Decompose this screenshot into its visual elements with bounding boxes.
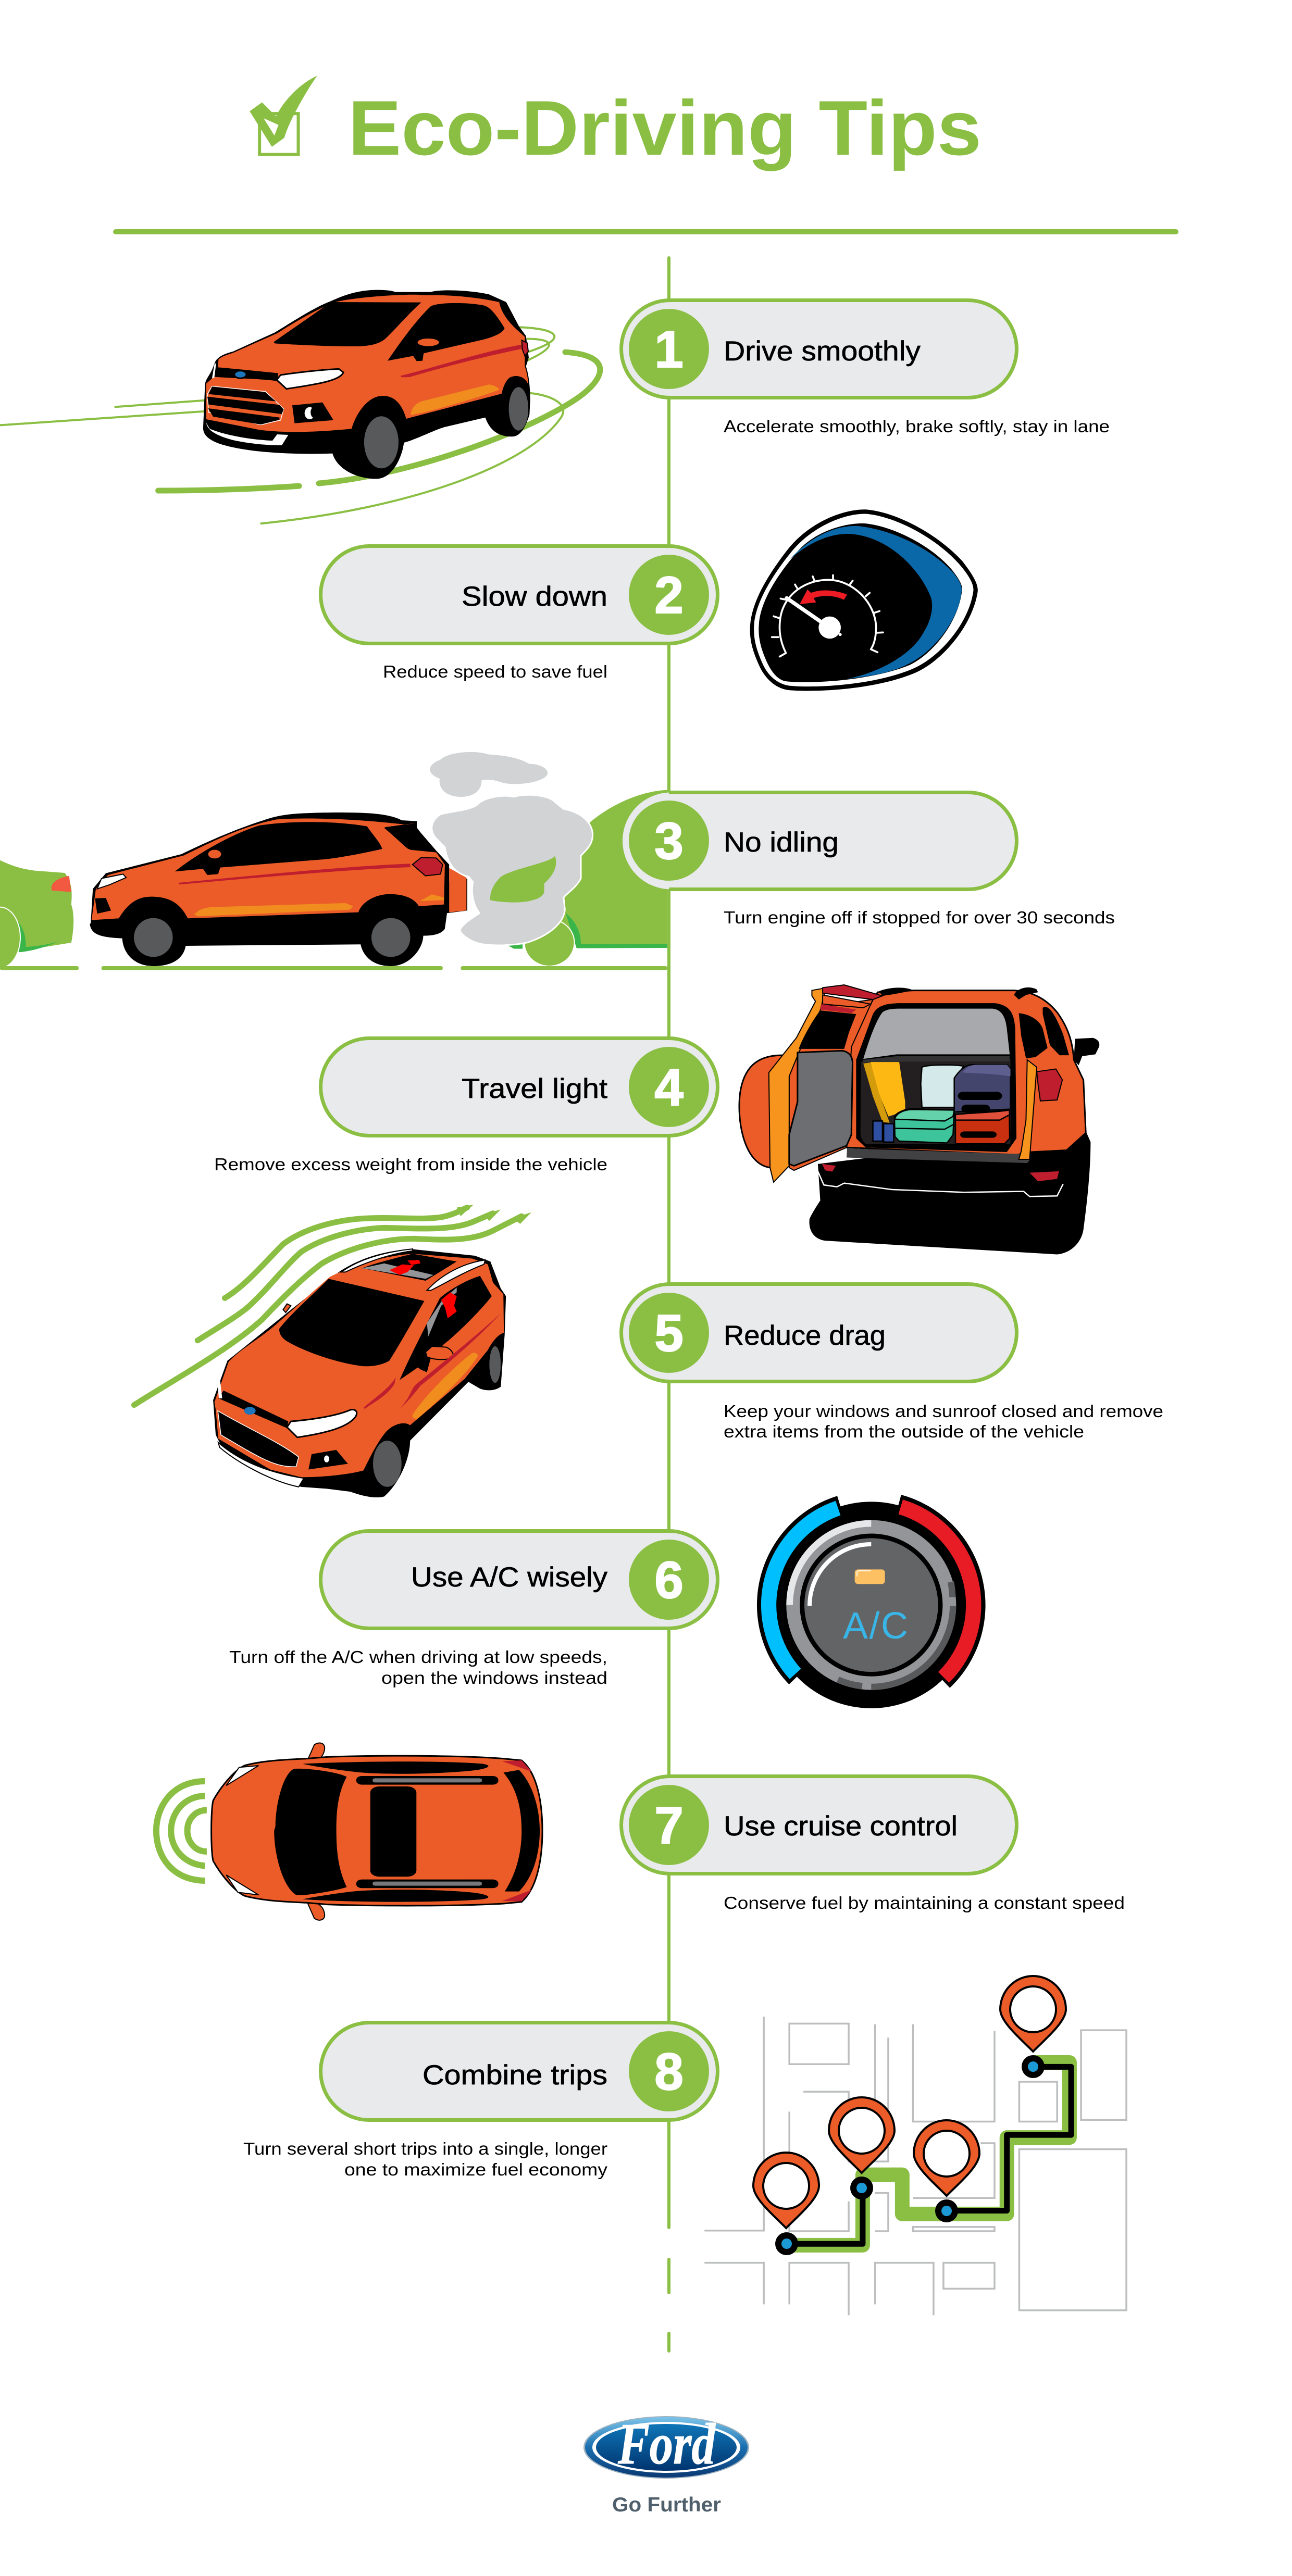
icon: check box <box>250 76 317 155</box>
A/C label: A/C <box>843 1605 908 1647</box>
panel: tip 6: Use A/C wisely <box>411 1562 608 1593</box>
panel: tip 4: Travel light <box>462 1073 607 1104</box>
panel: tip 4: 4 <box>654 1058 684 1117</box>
panel: tip 1 <box>621 300 1110 436</box>
logo: Ford: Ford <box>617 2412 716 2477</box>
car front view <box>203 290 530 479</box>
panel: tip 8 <box>243 2023 718 2179</box>
panel: tip 7 <box>621 1776 1125 1912</box>
panel: tip 5: extra items from the outside of the vehicle <box>724 1422 1084 1441</box>
panel: tip 3 <box>623 793 1115 927</box>
panel: tip 3: No idling <box>724 827 839 858</box>
panel: tip 6: 6 <box>654 1551 684 1609</box>
panel: tip 8: 8 <box>654 2043 684 2101</box>
title <box>250 76 982 171</box>
panel: tip 3: Turn engine off if stopped for over 30 seconds <box>724 908 1115 927</box>
illustration: route map with pins <box>704 1976 1126 2315</box>
panel: tip 4: Remove excess weight from inside the vehicle <box>214 1155 607 1174</box>
illustration: top view car with cruise waves <box>156 1743 542 1920</box>
illustration: speedometer <box>750 509 978 691</box>
airflow arrows <box>134 1205 531 1405</box>
panel: tip 6: open the windows instead <box>381 1668 607 1687</box>
panel: tip 8: Turn several short trips into a single, longer <box>243 2139 607 2158</box>
panel: tip 5: 5 <box>654 1304 684 1362</box>
illustration: A/C dial <box>768 1502 975 1708</box>
panel: tip 6 <box>229 1531 718 1687</box>
panel: tip 8: one to maximize fuel economy <box>344 2160 608 2179</box>
open tailgate and spare wheel <box>739 985 883 1182</box>
location pins <box>753 1976 1066 2228</box>
panel: tip 6: Turn off the A/C when driving at low speeds, <box>229 1647 607 1667</box>
green car right <box>488 790 667 966</box>
panel: tip 5 <box>621 1284 1163 1441</box>
map streets <box>704 2017 1126 2315</box>
luggage <box>863 1062 1011 1144</box>
panel: tip 2: Slow down <box>462 581 607 612</box>
panel: tip 3: 3 <box>654 812 684 870</box>
exhaust cloud <box>430 752 593 945</box>
panel: tip 8: Combine trips <box>423 2060 607 2091</box>
illustration: idling cars and exhaust <box>0 752 667 970</box>
panel: tip 1: 1 <box>654 320 684 379</box>
orange car side view <box>90 812 467 966</box>
panel: tip 7: 7 <box>654 1796 684 1855</box>
car roof view <box>212 1743 542 1920</box>
panel: tip 5: Keep your windows and sunroof closed and remove <box>724 1402 1163 1421</box>
illustration: open trunk with luggage <box>739 985 1099 1254</box>
title text: Eco-Driving Tips <box>348 84 982 171</box>
panel: tip 1: Accelerate smoothly, brake softly, stay in lane <box>724 417 1110 436</box>
panel: tip 2: Reduce speed to save fuel <box>383 662 607 681</box>
motion trails <box>0 327 600 523</box>
signal arcs <box>156 1781 207 1881</box>
route stop dots <box>775 2055 1045 2255</box>
panel: tip 2 <box>321 546 718 681</box>
illustration: car with airflow arrows <box>134 1205 531 1497</box>
tagline: Go Further <box>612 2494 721 2516</box>
route line <box>787 2062 1071 2245</box>
panel: tip 7: Conserve fuel by maintaining a constant speed <box>724 1893 1125 1912</box>
green car left <box>0 860 73 968</box>
panel: tip 5: Reduce drag <box>724 1320 886 1351</box>
car top-front view <box>213 1249 506 1497</box>
road <box>0 966 667 970</box>
timeline line <box>667 256 670 2353</box>
illustration: car driving smoothly <box>0 290 600 523</box>
panel: tip 4 <box>214 1039 718 1174</box>
panel: tip 1: Drive smoothly <box>724 336 921 367</box>
panel: tip 2: 2 <box>654 566 684 624</box>
panel: tip 7: Use cruise control <box>724 1811 958 1842</box>
